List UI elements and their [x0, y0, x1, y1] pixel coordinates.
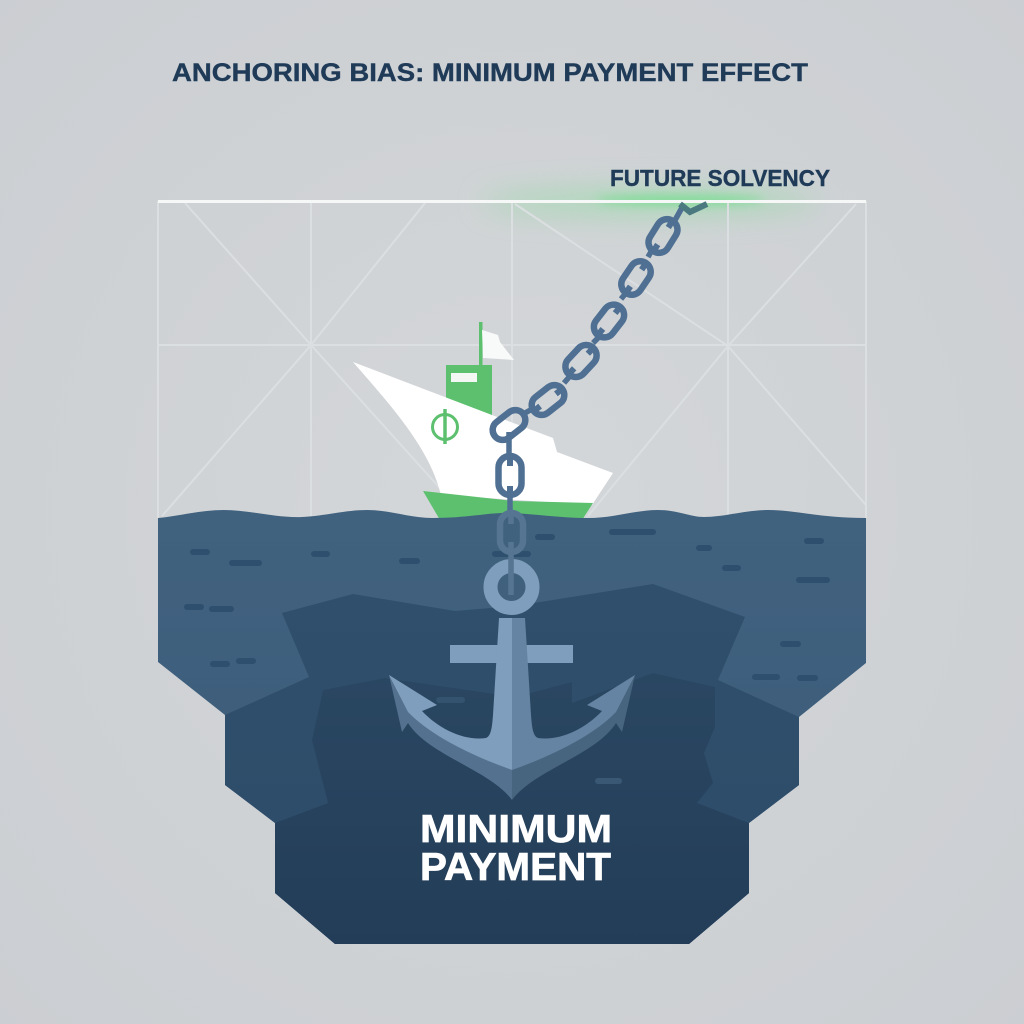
cabin window	[451, 373, 477, 382]
label line 1: MINIMUM	[420, 808, 612, 851]
hull logo	[432, 409, 458, 444]
anchor lower right shadow	[512, 675, 635, 800]
label line 2: PAYMENT	[420, 846, 611, 889]
anchor lower left shadow	[389, 675, 512, 800]
water dashes	[184, 529, 830, 784]
ship mast	[479, 322, 482, 368]
chain link under water	[500, 513, 523, 552]
title: ANCHORING BIAS: MINIMUM PAYMENT EFFECT	[172, 59, 808, 87]
chain link	[561, 341, 601, 381]
chain link	[617, 257, 655, 299]
chain down to anchor	[498, 432, 523, 595]
chain link	[645, 215, 681, 257]
ship flag	[482, 330, 514, 360]
chain connector under water	[508, 514, 514, 595]
chain link	[528, 381, 568, 419]
chain link above water	[498, 456, 522, 495]
anchor crossbar	[450, 645, 573, 663]
chain nubs	[507, 457, 513, 495]
anchor left arm and shank	[389, 618, 512, 770]
green glow at solvency line	[480, 188, 820, 216]
chain to future solvency	[489, 204, 707, 444]
chain link	[489, 406, 529, 444]
anchor label	[420, 808, 612, 889]
water: deep layer	[275, 673, 749, 944]
anchor right arm and shank	[512, 618, 635, 770]
chain connector	[509, 432, 510, 512]
scaffold grid	[158, 201, 866, 518]
icon: ship	[353, 322, 613, 520]
future solvency line	[158, 200, 866, 203]
green hull base	[423, 491, 593, 520]
anchor	[389, 566, 635, 800]
anchor ring	[490, 566, 532, 608]
water: upper layer	[158, 510, 866, 944]
label: future solvency: FUTURE SOLVENCY	[610, 165, 830, 191]
water: middle layer	[225, 584, 799, 944]
chain connectors	[525, 204, 684, 413]
top chain fragment	[680, 204, 707, 212]
ship cabin	[446, 365, 492, 420]
chain link	[590, 300, 628, 342]
ship hull	[353, 362, 613, 505]
